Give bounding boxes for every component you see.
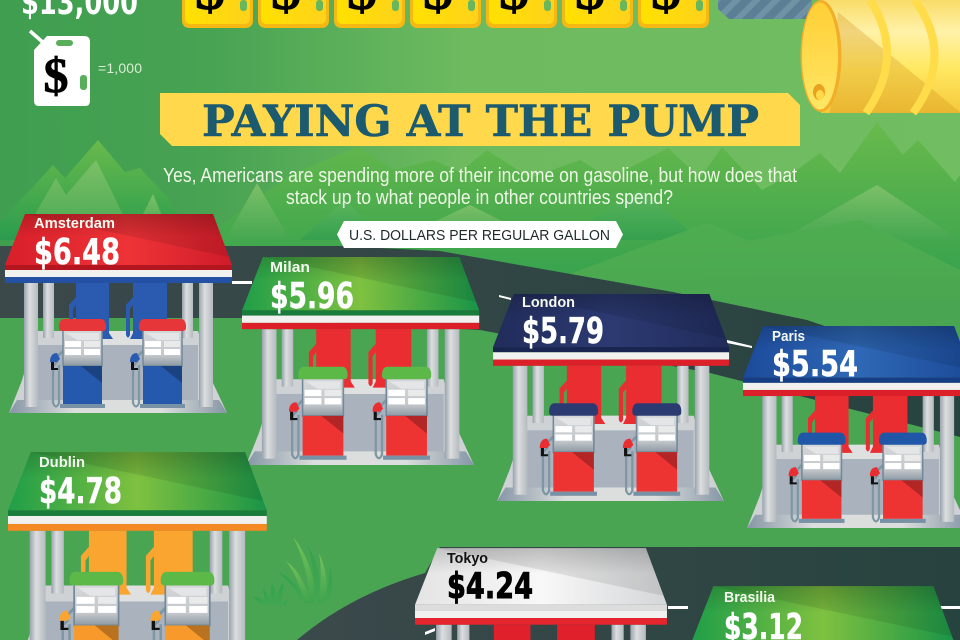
city label: Amsterdam [34, 215, 115, 232]
price: $4.78 [39, 471, 122, 512]
icon: can 2 [258, 0, 329, 28]
legend value: =1,000 [98, 60, 142, 76]
icon: can 1 [182, 0, 253, 28]
station: Amsterdam [5, 214, 232, 413]
price: $6.48 [34, 232, 120, 273]
intro text: stack up to what people in other countries spend? [286, 187, 673, 209]
unit label: U.S. DOLLARS PER REGULAR GALLON [349, 227, 610, 244]
icon: can 5 [486, 0, 557, 28]
city label: Brasilia [724, 589, 776, 606]
station: Milan [242, 257, 479, 465]
station: London [493, 294, 729, 501]
icon: can 4 [410, 0, 481, 28]
city label: Tokyo [447, 550, 488, 567]
station: Paris [743, 326, 960, 528]
hatched steel shape [718, 0, 812, 19]
icon: can 3 [334, 0, 405, 28]
icon: white fuel can legend [30, 31, 90, 106]
icon: can 6 [562, 0, 633, 28]
upper road [0, 246, 960, 437]
city label: Paris [772, 328, 805, 345]
price: $5.96 [270, 276, 354, 317]
intro text [163, 165, 797, 209]
unit label [337, 221, 623, 248]
icon: can 7 [638, 0, 709, 28]
city label: Dublin [39, 454, 85, 471]
station: Tokyo [415, 548, 667, 640]
price: $4.24 [447, 566, 533, 607]
price: $5.54 [772, 344, 858, 385]
intro text: Yes, Americans are spending more of their income on gasoline, but how does that [163, 165, 797, 187]
city label: Milan [270, 259, 310, 276]
station: Dublin [8, 452, 267, 640]
lower road [297, 547, 960, 640]
icon: white fuel can legend: $ [44, 47, 68, 103]
road markings [232, 281, 960, 635]
price: $5.79 [522, 311, 604, 352]
station: Brasilia [690, 586, 956, 640]
icon: grass tuft [253, 537, 332, 606]
grass field [0, 300, 960, 640]
mountain range [0, 122, 960, 340]
title banner: PAYING AT THE PUMP [202, 97, 759, 147]
icon: yellow oil barrel [800, 0, 960, 113]
row of yellow fuel cans [182, 0, 709, 28]
city label: London [522, 294, 575, 311]
